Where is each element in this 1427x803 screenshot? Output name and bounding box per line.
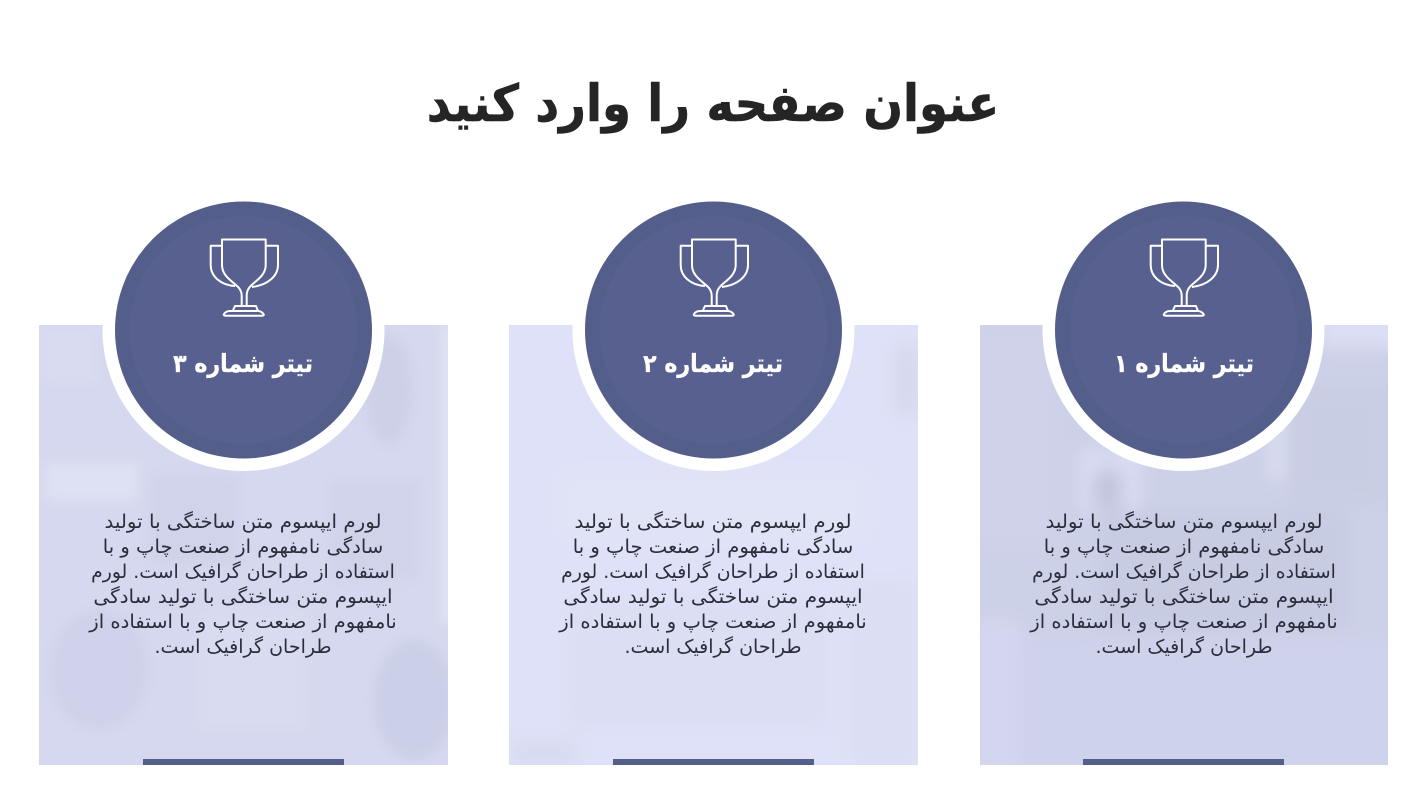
text block: card 3: سادگی نامفهوم از صنعت چاپ و با bbox=[103, 536, 383, 558]
text block: card 2: استفاده از طراحان گرافیک است. لورم bbox=[561, 561, 865, 583]
heading: card 1: تیتر شماره ۱ bbox=[1114, 349, 1254, 378]
card 3 background and badge bbox=[39, 202, 448, 765]
text block: card 1: طراحان گرافیک است. bbox=[1096, 636, 1272, 658]
text block: card 2: سادگی نامفهوم از صنعت چاپ و با bbox=[573, 536, 853, 558]
text block: card 1: سادگی نامفهوم از صنعت چاپ و با bbox=[1044, 536, 1324, 558]
text block: card 2: طراحان گرافیک است. bbox=[624, 636, 801, 658]
text block: card 3: لورم ایپسوم متن ساختگی با تولید bbox=[104, 511, 382, 533]
text block: card 1: استفاده از طراحان گرافیک است. لورم bbox=[1032, 561, 1336, 583]
text block: card 3 bbox=[88, 511, 397, 658]
text block: card 1: ایپسوم متن ساختگی با تولید سادگی bbox=[1034, 586, 1334, 608]
icon: trophy bbox=[211, 240, 278, 316]
icon: trophy bbox=[681, 240, 748, 316]
panel: card 1 bbox=[980, 202, 1388, 765]
text block: card 2 bbox=[558, 511, 867, 658]
card 2 background and badge bbox=[509, 202, 918, 765]
bottom accent bar bbox=[1083, 759, 1284, 765]
text block: card 3: طراحان گرافیک است. bbox=[154, 636, 331, 658]
text block: card 3: نامفهوم از صنعت چاپ و با استفاده از bbox=[89, 611, 397, 633]
text block: card 2: ایپسوم متن ساختگی با تولید سادگی bbox=[563, 586, 863, 608]
heading: card 3: تیتر شماره ۳ bbox=[173, 349, 313, 378]
card 1 background and badge bbox=[980, 202, 1388, 765]
panel: card 3 bbox=[39, 202, 448, 765]
heading: card 2: تیتر شماره ۲ bbox=[643, 349, 783, 378]
title: عنوان صفحه را وارد کنید bbox=[427, 75, 999, 134]
text block: card 2: لورم ایپسوم متن ساختگی با تولید bbox=[574, 511, 852, 533]
bottom accent bar bbox=[143, 759, 344, 765]
text block: card 1 bbox=[1029, 511, 1338, 658]
text block: card 3: ایپسوم متن ساختگی با تولید سادگی bbox=[93, 586, 393, 608]
text block: card 2: نامفهوم از صنعت چاپ و با استفاده از bbox=[559, 611, 867, 633]
panel: card 2 bbox=[509, 202, 918, 765]
text block: card 1: نامفهوم از صنعت چاپ و با استفاده از bbox=[1030, 611, 1338, 633]
bottom accent bar bbox=[613, 759, 814, 765]
text block: card 1: لورم ایپسوم متن ساختگی با تولید bbox=[1045, 511, 1323, 533]
text block: card 3: استفاده از طراحان گرافیک است. لورم bbox=[91, 561, 395, 583]
icon: trophy bbox=[1151, 240, 1218, 316]
